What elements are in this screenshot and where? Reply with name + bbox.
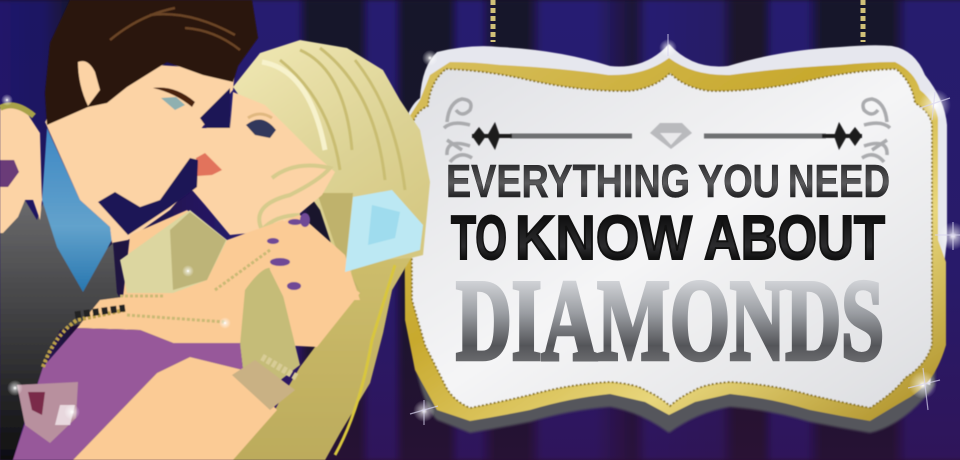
sign shadow: [415, 340, 935, 433]
woman: lips: [196, 153, 222, 176]
icon: heart diamond: [17, 382, 78, 443]
sign panel: [411, 69, 932, 408]
woman: hair lock at neck: [120, 210, 227, 293]
beaded strap: [75, 308, 125, 315]
woman: arm: [73, 357, 277, 460]
gap between faces: [200, 88, 230, 128]
ornament: right swirl: [862, 99, 890, 162]
ornament: left swirl: [444, 99, 472, 162]
hanging chains: [493, 0, 863, 42]
woman: necklace: [120, 250, 270, 322]
heading: to know about: ABOUT: [704, 204, 885, 273]
dress gold trim: [43, 310, 125, 367]
man: shirt: [42, 128, 112, 292]
sign gold frame: [404, 58, 946, 421]
heading: to know about: KNOW: [515, 204, 692, 273]
man: eye and brow: [153, 88, 195, 110]
heading: everything you need: YOU: [698, 155, 780, 207]
woman: hand on man's shoulder: [0, 107, 42, 233]
purple ring gem: [0, 160, 19, 187]
illustration: couple: [0, 0, 430, 460]
divider: left rule and finial: [472, 122, 632, 150]
sign silver outer edge: [404, 44, 947, 385]
heading: to know about: TO: [451, 204, 507, 273]
woman: eye: [246, 114, 276, 138]
woman: hand and nails: [267, 213, 360, 300]
woman: purple dress: [13, 328, 243, 460]
gold bracelet on left hand: [0, 105, 34, 116]
man: ear: [78, 61, 100, 106]
woman: bracelets: [232, 357, 298, 410]
divider: right rule and finial: [704, 122, 862, 150]
woman: hair curl by ear: [259, 166, 330, 230]
man: hair: [45, 0, 258, 125]
icon: large ice diamond: [345, 190, 423, 272]
icon: small diamond: [650, 123, 692, 149]
woman: face: [192, 92, 335, 235]
heading: everything you need: NEED: [788, 155, 890, 207]
woman: side hair curl: [240, 268, 300, 382]
heading: everything you need: EVERYTHING: [446, 155, 690, 207]
gap under man's jaw: [98, 158, 198, 235]
woman: long hair: [230, 40, 430, 460]
woman: hair behind hand: [317, 193, 362, 295]
man: face and neck: [45, 60, 235, 243]
woman: chest and shoulder: [77, 210, 360, 347]
man: jacket: [0, 200, 127, 460]
sign plaque: [404, 44, 947, 433]
woman: lower hair: [230, 258, 411, 460]
